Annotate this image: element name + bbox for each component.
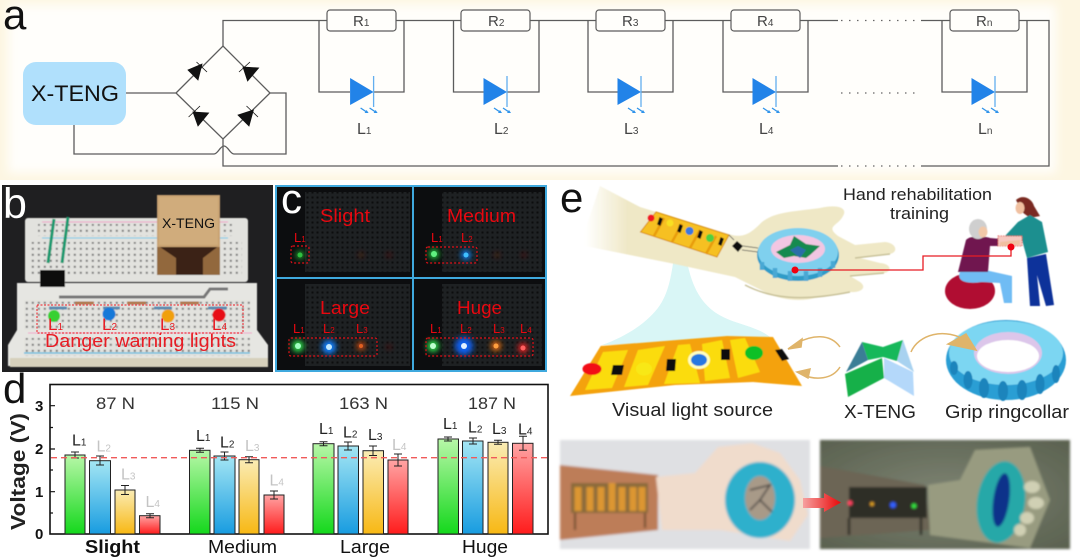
upper breadboard bbox=[25, 218, 248, 282]
LEDs: L2 bbox=[494, 121, 509, 138]
x axis labels bbox=[85, 537, 508, 557]
LED labels above bars: L3 bbox=[492, 421, 507, 438]
left photo: hand squeezing ring bbox=[560, 440, 810, 549]
L labels on breadboard bbox=[48, 315, 227, 334]
LED labels above bars: L2 bbox=[343, 424, 358, 441]
hand rehabilitation heading bbox=[843, 185, 992, 223]
grip ring on palm bbox=[757, 228, 839, 281]
grey LED labels: L3 bbox=[121, 466, 136, 483]
LEDs: L4 bbox=[759, 121, 774, 138]
grey LED labels: L2 bbox=[96, 439, 111, 456]
force labels bbox=[96, 394, 516, 413]
L labels on breadboard: L1 bbox=[48, 315, 63, 334]
danger warning lights label: Danger warning lights bbox=[45, 331, 236, 351]
grey wire and resistors bbox=[49, 289, 228, 308]
dotted continuation lines bbox=[841, 20, 918, 166]
LED labels above bars: L1 bbox=[319, 421, 334, 438]
bars bbox=[65, 439, 533, 534]
L labels: L3 bbox=[356, 321, 368, 336]
red dashed highlight boxes bbox=[289, 246, 533, 356]
L labels on breadboard: L4 bbox=[212, 315, 227, 334]
LEDs: L1 bbox=[357, 121, 372, 138]
X-TENG cardboard block bbox=[157, 195, 220, 275]
panel e: hand rehabilitation application bbox=[560, 174, 1070, 549]
grip ring collar bbox=[946, 320, 1066, 401]
force labels: 87 N bbox=[96, 394, 135, 413]
y axis labels: 3 bbox=[35, 398, 43, 415]
LED labels above bars: L1 bbox=[443, 416, 458, 433]
black rectifier chip bbox=[40, 270, 65, 287]
level labels: Huge bbox=[457, 298, 502, 318]
y axis title: Voltage (V) bbox=[8, 413, 30, 530]
red dashed highlight bbox=[37, 305, 243, 333]
LEDs: L3 bbox=[624, 121, 639, 138]
hand rehabilitation heading: Hand rehabilitation bbox=[843, 185, 992, 204]
LED labels above bars: L3 bbox=[368, 427, 383, 444]
x axis labels: Large bbox=[340, 537, 390, 557]
panel letter e: e bbox=[560, 174, 583, 221]
green jumper wires bbox=[48, 217, 68, 263]
y axis labels bbox=[35, 398, 43, 543]
component labels: X-TENG bbox=[844, 402, 916, 422]
illustrated arm and hand bbox=[580, 186, 895, 300]
grey LED labels: L4 bbox=[392, 437, 407, 454]
grey LED labels: L4 bbox=[146, 494, 160, 511]
panel letter d: d bbox=[3, 365, 26, 412]
LEDs: Ln bbox=[978, 121, 992, 138]
LED labels above bars: L2 bbox=[220, 434, 235, 451]
x axis labels: Huge bbox=[462, 537, 508, 557]
hand rehabilitation heading: training bbox=[890, 204, 949, 223]
LEDs bbox=[350, 76, 999, 138]
resistors: R2 bbox=[488, 13, 505, 30]
chart frame and ticks bbox=[50, 384, 548, 534]
flexible light source bbox=[570, 336, 802, 396]
X-TENG block bbox=[23, 62, 126, 125]
L labels: L1 bbox=[430, 321, 442, 336]
resistors: R3 bbox=[622, 13, 639, 30]
level labels bbox=[320, 206, 516, 318]
diode bridge bbox=[188, 62, 259, 126]
grey LED labels bbox=[96, 437, 407, 511]
grey LED labels: L3 bbox=[245, 438, 260, 455]
L labels: L2 bbox=[461, 230, 473, 245]
resistors: Rn bbox=[976, 13, 992, 30]
red arrow between photos bbox=[803, 493, 841, 512]
X-TENG origami structure bbox=[845, 340, 914, 397]
LED labels above bars bbox=[72, 416, 533, 451]
L labels: L2 bbox=[460, 321, 472, 336]
x axis labels: Medium bbox=[208, 537, 277, 557]
X-TENG label on block: X-TENG bbox=[162, 215, 215, 231]
resistors: R1 bbox=[353, 13, 370, 30]
panel letter c: c bbox=[281, 175, 302, 222]
L labels: L1 bbox=[293, 321, 305, 336]
y axis labels: 1 bbox=[35, 484, 43, 501]
component labels: Grip ringcollar bbox=[945, 402, 1069, 422]
X-TENG block: X-TENG bbox=[31, 81, 119, 106]
LED labels above bars: L1 bbox=[72, 433, 87, 450]
component labels bbox=[612, 400, 1069, 422]
x axis labels: Slight bbox=[85, 537, 140, 557]
glowing LEDs bbox=[292, 249, 528, 355]
resistors: R4 bbox=[757, 13, 774, 30]
L labels bbox=[293, 230, 532, 336]
panel letter b: b bbox=[3, 180, 27, 228]
L labels: L1 bbox=[431, 230, 443, 245]
y axis labels: 2 bbox=[35, 441, 43, 458]
force labels: 163 N bbox=[339, 394, 388, 413]
force labels: 187 N bbox=[468, 394, 516, 413]
y axis labels: 0 bbox=[35, 526, 43, 543]
circuit wires bbox=[74, 20, 1049, 166]
level labels: Slight bbox=[320, 206, 370, 226]
quadrant backgrounds bbox=[277, 187, 545, 370]
panel a: circuit diagram bbox=[0, 0, 1080, 180]
component labels: Visual light source bbox=[612, 400, 773, 420]
L labels: L4 bbox=[520, 321, 532, 336]
curved assembly arrows bbox=[788, 334, 976, 378]
LED labels above bars: L2 bbox=[468, 419, 483, 436]
threshold dashed line bbox=[51, 457, 547, 459]
panel c: LED brightness photos bbox=[275, 175, 547, 372]
L labels: L3 bbox=[493, 321, 505, 336]
L labels on breadboard: L2 bbox=[102, 315, 117, 334]
light beam funnel bbox=[602, 250, 773, 345]
breadboard LEDs bbox=[48, 308, 226, 322]
L labels on breadboard: L3 bbox=[160, 315, 175, 334]
L labels: L2 bbox=[323, 321, 335, 336]
L labels: L1 bbox=[294, 230, 306, 245]
right photo: LEDs lit in dark bbox=[820, 440, 1070, 549]
wearable light strip bbox=[640, 212, 758, 257]
resistors bbox=[327, 10, 1019, 31]
force labels: 115 N bbox=[211, 394, 259, 413]
patient and therapist bbox=[945, 197, 1054, 309]
error bars bbox=[71, 436, 527, 518]
red connection line bbox=[792, 244, 1014, 274]
LED labels above bars: L1 bbox=[196, 428, 211, 445]
level labels: Large bbox=[320, 298, 370, 318]
panel d: voltage bar chart bbox=[3, 365, 548, 557]
level labels: Medium bbox=[447, 206, 516, 226]
grey LED labels: L4 bbox=[270, 473, 284, 490]
lower breadboard bbox=[8, 283, 268, 367]
LED labels above bars: L4 bbox=[518, 421, 533, 438]
panel b: breadboard photo bbox=[2, 180, 273, 372]
